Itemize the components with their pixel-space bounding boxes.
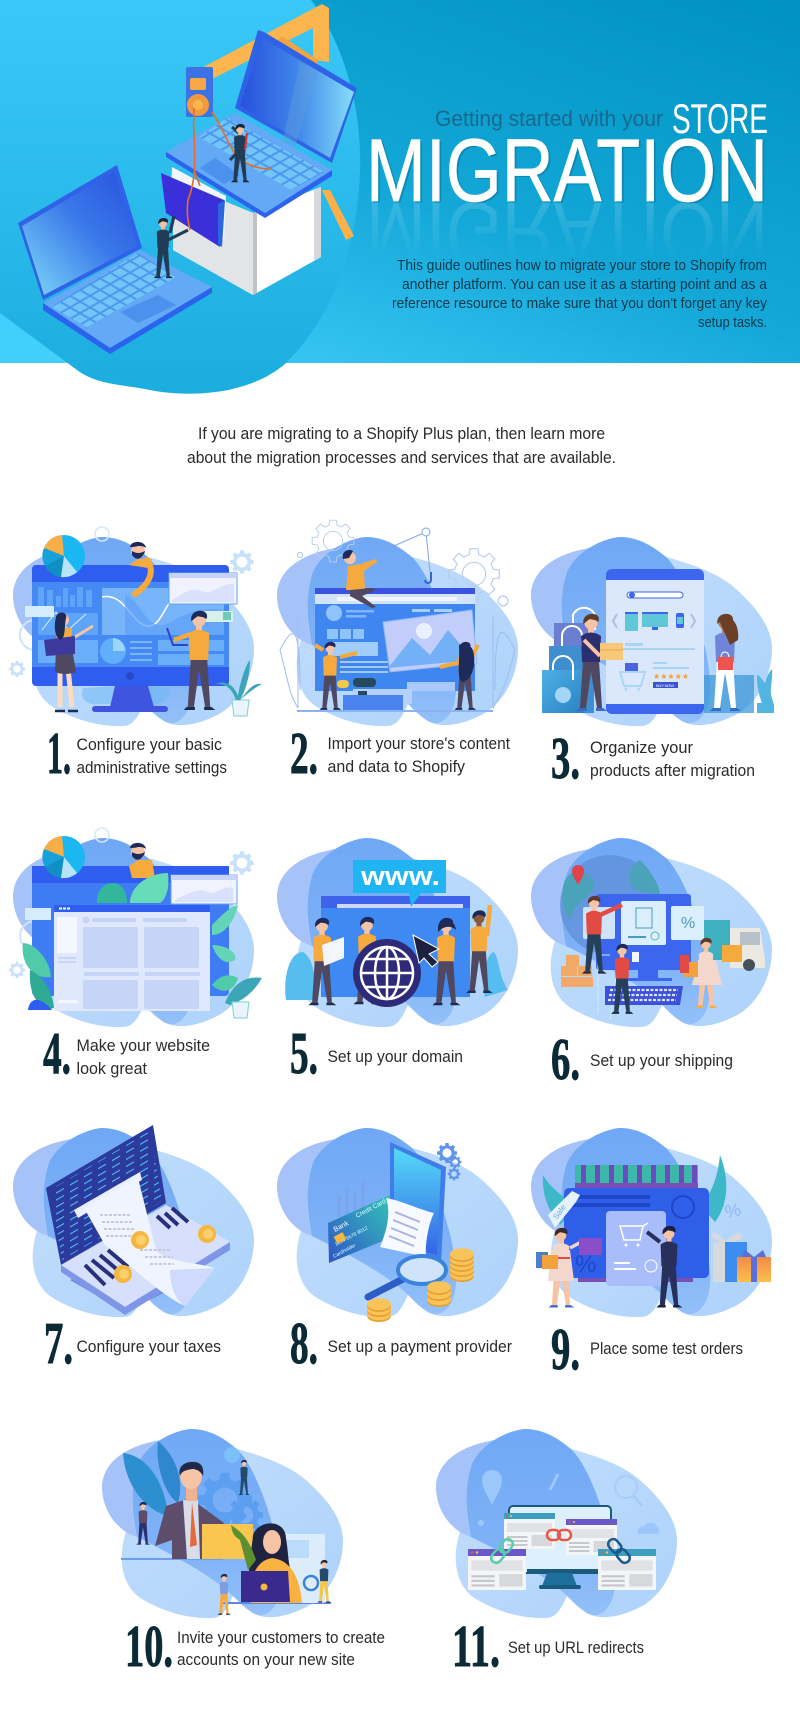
text block: guide description: This guide outlines how to migrate your store to Shopify from <box>397 258 767 274</box>
label 6: Set up your shipping <box>590 1051 733 1070</box>
laptop: yellow <box>202 1524 253 1559</box>
illustration: shopping phone <box>542 569 774 714</box>
figure: man with parcel <box>576 614 623 711</box>
heading: Getting started: Getting started with your <box>435 106 663 131</box>
figure: woman support agent <box>231 1523 302 1603</box>
figure: woman <box>432 918 460 1005</box>
text block: guide description: setup tasks. <box>698 315 767 331</box>
sale tag: Sale <box>551 1202 568 1221</box>
illustration: payment <box>328 1142 474 1322</box>
number 3: 3. <box>551 725 580 791</box>
credit card: Bank <box>333 1220 350 1234</box>
banner: www. <box>353 860 446 907</box>
label 7: Configure your taxes <box>76 1337 221 1356</box>
panel: step 11 <box>436 1429 677 1679</box>
receipt <box>84 1178 215 1306</box>
chain links <box>489 1530 632 1565</box>
figure: businessman <box>155 1462 224 1559</box>
figure: person with laptop <box>308 918 344 1005</box>
label 3: products after migration <box>590 761 755 780</box>
label 4 <box>76 1036 210 1078</box>
illustration: store test orders <box>536 1155 771 1308</box>
leaves <box>23 873 262 1010</box>
figure: person with globe <box>354 917 381 1004</box>
number 5: 5. <box>290 1020 318 1086</box>
label 4: look great <box>76 1059 147 1078</box>
figure: man pulling at top <box>230 124 250 182</box>
number 2: 2. <box>290 720 318 786</box>
coins <box>114 1225 216 1283</box>
panel: step 1 <box>9 527 262 786</box>
label 3 <box>590 738 755 780</box>
text block: Shopify Plus intro: If you are migrating to a Shopify Plus plan, then learn more <box>198 424 605 443</box>
figure: man pushing at bottom <box>154 216 188 278</box>
text block: guide description: another platform. You can use it as a starting point and as a <box>402 277 768 293</box>
panel: step 7 <box>13 1125 254 1376</box>
label 2: Import your store's content <box>328 734 510 753</box>
panel: step 8 <box>277 1128 518 1376</box>
label 5: Set up your domain <box>328 1047 463 1066</box>
image card <box>383 610 477 672</box>
illustration: tax receipt laptop <box>46 1125 230 1315</box>
text block: Shopify Plus intro <box>187 424 616 467</box>
figure: man at tablet <box>647 1226 682 1307</box>
banner: www.: www. <box>360 861 440 891</box>
illustration: shopping phone: ★★★★★ <box>653 672 689 681</box>
gift boxes <box>712 1233 771 1282</box>
label 2: and data to Shopify <box>328 757 465 776</box>
number 8: 8. <box>290 1310 318 1376</box>
label 1: Configure your basic <box>76 735 222 754</box>
credit card: Credit Card <box>355 1198 388 1220</box>
icon: location pin <box>572 865 584 885</box>
label 1: administrative settings <box>76 758 227 777</box>
card: floating area chart <box>169 573 237 604</box>
figure: woman with folder <box>44 613 93 711</box>
number 9: 9. <box>551 1316 580 1382</box>
figure: man leaning on monitor <box>129 542 152 594</box>
label 4: Make your website <box>76 1036 210 1055</box>
label 10 <box>177 1628 385 1669</box>
illustration: store test orders: % <box>723 1199 742 1222</box>
credit card <box>328 1195 390 1263</box>
panel: step 5 <box>277 838 518 1086</box>
illustration: URL redirects <box>468 1470 659 1590</box>
panel: step 4 <box>9 828 262 1086</box>
label 8: Set up a payment provider <box>328 1337 512 1356</box>
label 10: accounts on your new site <box>177 1650 355 1669</box>
label 3: Organize your <box>590 738 693 757</box>
text block: guide description <box>392 258 768 331</box>
credit card: Cardholder <box>332 1243 357 1260</box>
figure: man with laptop <box>167 611 215 710</box>
figure: woman shopper <box>536 1228 602 1308</box>
illustration: shipping: % <box>681 915 695 932</box>
illustration: dashboard monitor <box>9 527 262 716</box>
illustration: website import <box>280 520 515 712</box>
phone <box>390 1142 446 1263</box>
number 7: 7. <box>44 1310 73 1376</box>
illustration: shopping phone: BUY NOW <box>656 683 674 688</box>
figure: woman with bags <box>680 938 742 1008</box>
icon: cursor <box>413 935 439 967</box>
panel: step 6 <box>531 838 772 1092</box>
label 1 <box>76 735 227 777</box>
credit card: 1234 5678 9012 <box>334 1225 369 1248</box>
label 11: Set up URL redirects <box>508 1638 644 1657</box>
browser windows <box>468 1513 656 1590</box>
illustration: isometric migration scene <box>18 4 357 354</box>
faint icons <box>478 1470 659 1534</box>
panel: step 2 <box>277 520 518 786</box>
sale tag <box>548 1191 580 1228</box>
figure: man in red pointing <box>582 896 622 974</box>
label 10: Invite your customers to create <box>177 1628 385 1647</box>
illustration: website design <box>9 828 262 1018</box>
number 11: 11. <box>452 1613 500 1679</box>
label 2 <box>328 734 510 776</box>
icon: plant <box>216 660 262 716</box>
number 4: 4. <box>43 1020 71 1086</box>
panel: header banner <box>0 0 800 394</box>
figure: person on browser <box>343 550 384 608</box>
number 1: 1. <box>47 720 71 786</box>
panel: step 9 <box>531 1128 772 1382</box>
figure: person right <box>440 642 478 710</box>
illustration: domain <box>285 860 508 1007</box>
coins <box>367 1248 474 1322</box>
text block: guide description: reference resource to make sure that you don't forget any key <box>392 296 768 312</box>
figure: woman with red bag <box>710 614 741 711</box>
figure: man in red with clipboard <box>611 944 639 1014</box>
illustration: store test orders: % <box>575 1251 596 1278</box>
panel: step 10 <box>102 1429 385 1679</box>
figure: person waving <box>466 905 493 993</box>
illustration: customer accounts <box>121 1441 331 1615</box>
label 9: Place some test orders <box>590 1339 743 1358</box>
tablet <box>606 1211 666 1286</box>
number 6: 6. <box>551 1026 580 1092</box>
magnifier <box>368 1256 446 1297</box>
header blob <box>0 0 360 394</box>
figure: person left <box>315 642 357 710</box>
icon: pie chart <box>42 535 85 577</box>
panel: step 3 <box>531 537 774 791</box>
number 10: 10. <box>125 1613 173 1679</box>
browser mockup <box>54 905 210 1011</box>
monitor <box>509 1506 611 1589</box>
text block: Shopify Plus intro: about the migration processes and services that are available. <box>187 448 616 467</box>
tiny people <box>136 1460 331 1615</box>
receipt <box>380 1198 434 1257</box>
illustration: shipping <box>560 855 765 1020</box>
icon: globe <box>353 939 421 1007</box>
